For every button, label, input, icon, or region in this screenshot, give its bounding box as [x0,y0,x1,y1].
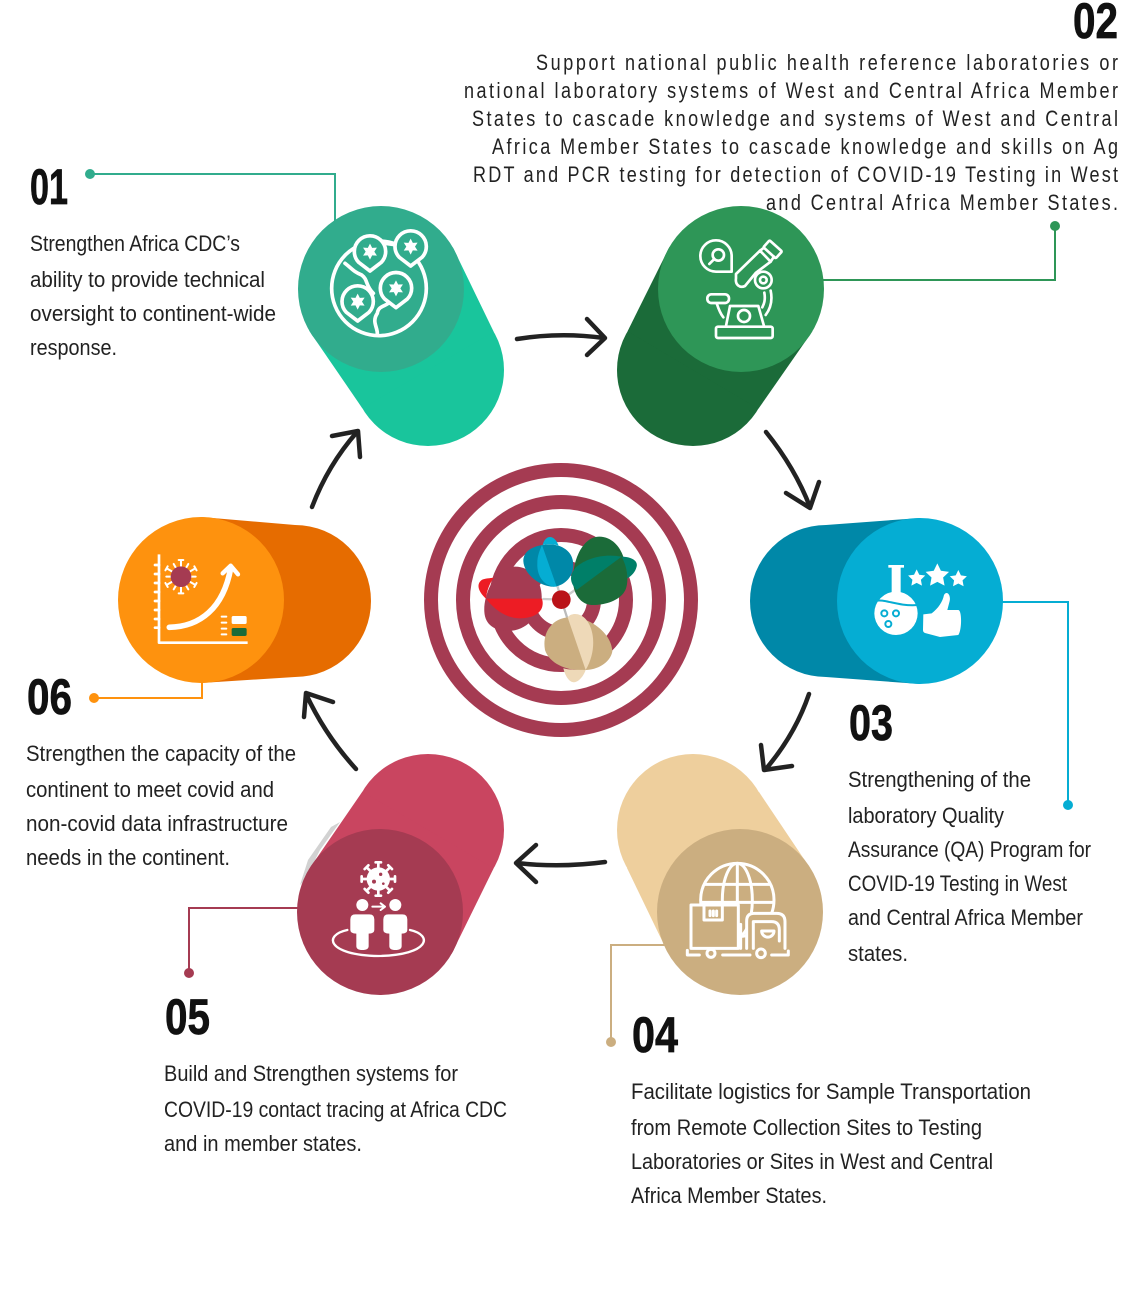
connector: step 01 [85,169,335,222]
connector: step 04 [606,945,670,1047]
icon: globe with virus pins [332,231,426,336]
text block: step 04: Laboratories or Sites in West and Central [631,1149,993,1174]
number 05: 05 [165,989,210,1045]
arrow: step 03 to 04 [761,694,809,770]
text block: step 02: Africa Member States to cascade knowledge and skills on Ag [492,135,1118,159]
connector: step 05 [184,908,305,978]
icon: microscope and location pin [700,240,782,338]
central target rings [431,470,691,730]
text block: step 06: needs in the continent. [26,845,230,870]
arrow: step 06 to 01 [312,431,360,507]
text block: step 03: Strengthening of the [848,767,1031,792]
text block: step 04: from Remote Collection Sites to Testing [631,1115,982,1140]
number 01: 01 [30,159,68,215]
text block: step 01: ability to provide technical [30,267,265,292]
connector: step 02 [815,221,1060,280]
text block: step 03 [848,767,1091,966]
arrow: step 05 to 06 [304,693,356,769]
text block: step 04: Facilitate logistics for Sample Transportation [631,1079,1031,1104]
text block: step 06: Strengthen the capacity of the [26,741,296,766]
text block: step 03: Assurance (QA) Program for [848,837,1091,862]
text block: step 04: Africa Member States. [631,1183,827,1208]
text block: step 06: non-covid data infrastructure [26,811,288,836]
icon: growth chart with virus [155,554,248,643]
text block: step 03: COVID-19 Testing in West [848,871,1067,896]
text block: step 02: Support national public health reference laboratories or [536,51,1118,75]
central four-colour pinwheel [478,537,637,682]
text block: step 01 [30,231,276,360]
capsule: step 02 [617,206,824,446]
capsule: step 03 [750,518,1003,684]
number 04: 04 [632,1007,678,1063]
text block: step 02: national laboratory systems of West and Central Africa Member [464,79,1118,103]
text block: step 05 [164,1061,507,1156]
capsule: step 01 [298,206,504,446]
text block: step 02: States to cascade knowledge and systems of West and Central [472,107,1118,131]
icon: virus passing between two people [333,862,424,956]
text block: step 01: Strengthen Africa CDC’s [30,231,240,256]
capsule: step 04 [617,754,823,995]
arrow: step 01 to 02 [517,319,605,355]
text block: step 01: response. [30,335,117,360]
capsule: step 06 [118,517,371,683]
text block: step 06: continent to meet covid and [26,777,274,802]
text block: step 06 [26,741,296,870]
number 06: 06 [27,669,72,725]
number 03: 03 [849,695,893,751]
icon: flask, stars and thumbs up [874,563,967,637]
text block: step 03: and Central Africa Member [848,905,1083,930]
text block: step 05: and in member states. [164,1131,362,1156]
text block: step 02: RDT and PCR testing for detection of COVID-19 Testing in West [473,163,1118,187]
text block: step 02 [464,51,1118,215]
connector: step 06 [89,675,202,703]
text block: step 05: Build and Strengthen systems for [164,1061,458,1086]
arrow: step 02 to 03 [766,432,819,508]
arrow: step 04 to 05 [516,845,605,882]
text block: step 01: oversight to continent-wide [30,301,276,326]
text block: step 02: and Central Africa Member States. [766,191,1118,215]
text block: step 05: COVID-19 contact tracing at Africa CDC [164,1097,507,1122]
text block: step 04 [631,1079,1031,1208]
connector: step 03 [995,602,1073,810]
text block: step 03: laboratory Quality [848,803,1004,828]
text block: step 03: states. [848,941,908,966]
capsule: step 05 [297,754,504,995]
icon: globe, parcel and truck [687,863,788,958]
